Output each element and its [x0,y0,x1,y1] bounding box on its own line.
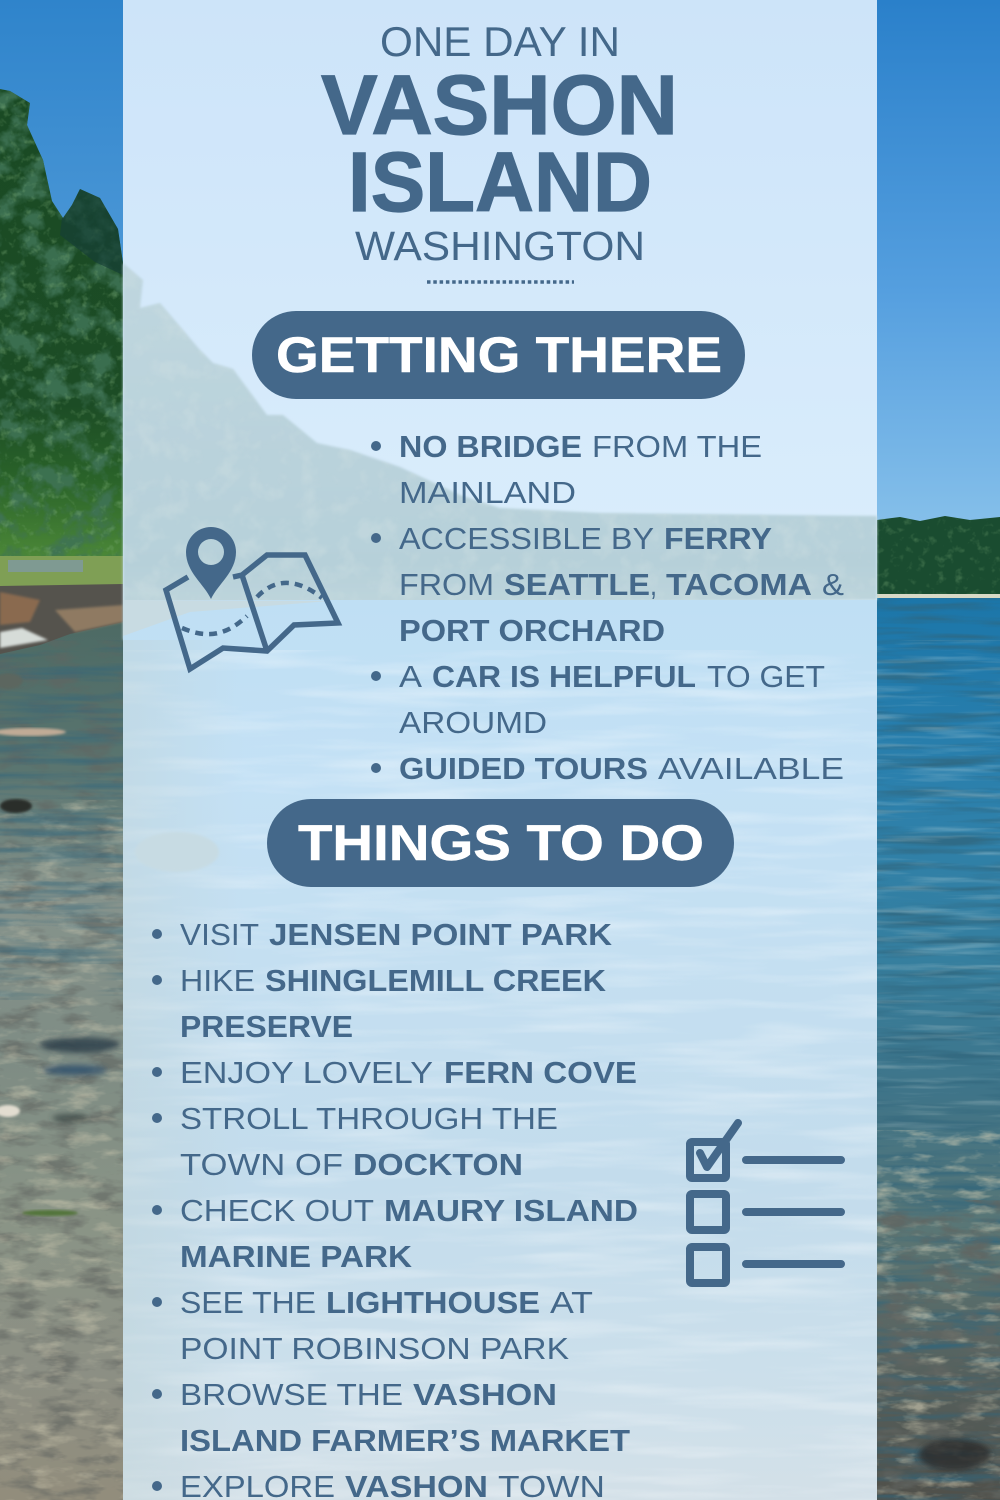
list: getting there bullets: FROM [399,567,494,602]
list: things to do bullets: FERN COVE [444,1055,637,1090]
section: getting there [166,311,844,786]
title block [321,18,678,269]
list: things to do bullets: MAURY ISLAND [384,1193,638,1228]
list: things to do bullets: VASHON [413,1377,557,1412]
list: getting there bullets: MAINLAND [399,475,576,510]
list: getting there bullets [371,429,844,786]
list: getting there bullets: FROM THE [592,429,762,464]
list: getting there bullets: NO BRIDGE [399,429,582,464]
rocks and dark patches in the shallows [0,673,120,1216]
list: getting there bullets: FERRY [664,521,772,556]
heading pill: things to do [267,799,734,887]
list: things to do bullets [152,917,638,1500]
list: getting there bullets: TO GET [707,659,825,694]
list: things to do bullets: PRESERVE [180,1009,353,1044]
list: things to do bullets: CHECK OUT [180,1193,374,1228]
list: things to do bullets: BROWSE THE [180,1377,403,1412]
list: things to do bullets: HIKE [180,963,255,998]
list: getting there bullets: CAR IS HELPFUL [432,659,696,694]
heading pill: getting there: GETTING THERE [276,327,722,383]
list: things to do bullets: LIGHTHOUSE [326,1285,540,1320]
list: things to do bullets: DOCKTON [353,1147,523,1182]
icon: checklist [690,1123,841,1283]
list: getting there bullets: AVAILABLE [658,751,844,786]
list: getting there bullets: AROUMD [399,705,547,740]
list: things to do bullets: ENJOY LOVELY [180,1055,433,1090]
title: island: ISLAND [348,135,652,229]
title: washington: WASHINGTON [355,223,645,269]
list: getting there bullets: TACOMA [666,567,812,602]
list: things to do bullets: AT [550,1285,593,1320]
list: things to do bullets: SEE THE [180,1285,316,1320]
list: things to do bullets: TOWN OF [180,1147,343,1182]
list: things to do bullets: ISLAND FARMER’S MARKET [180,1423,630,1458]
icon: map with location pin [166,527,338,669]
list: things to do bullets: VISIT [180,917,259,952]
submerged stone [135,832,219,872]
list: things to do bullets: JENSEN POINT PARK [269,917,613,952]
background photo: left shore, forest and beach [0,0,123,1500]
list: things to do bullets: MARINE PARK [180,1239,413,1274]
list: getting there bullets: , [650,567,657,602]
list: getting there bullets: ACCESSIBLE BY [399,521,654,556]
title: vashon: VASHON [321,58,678,152]
background photo: right sky, tree line and water [877,0,1000,1500]
heading pill: things to do: THINGS TO DO [298,815,704,871]
title: one day in: ONE DAY IN [380,18,620,65]
list: things to do bullets: POINT ROBINSON PARK [180,1331,569,1366]
heading pill: getting there [252,311,745,399]
list: things to do bullets: STROLL THROUGH THE [180,1101,558,1136]
list: getting there bullets: GUIDED TOURS [399,751,648,786]
translucent content panel [123,0,877,1500]
list: getting there bullets: A [399,659,422,694]
list: getting there bullets: & [822,567,844,602]
list: things to do bullets: SHINGLEMILL CREEK [265,963,607,998]
list: getting there bullets: SEATTLE [504,567,650,602]
list: getting there bullets: PORT ORCHARD [399,613,665,648]
section: things to do [152,799,841,1500]
